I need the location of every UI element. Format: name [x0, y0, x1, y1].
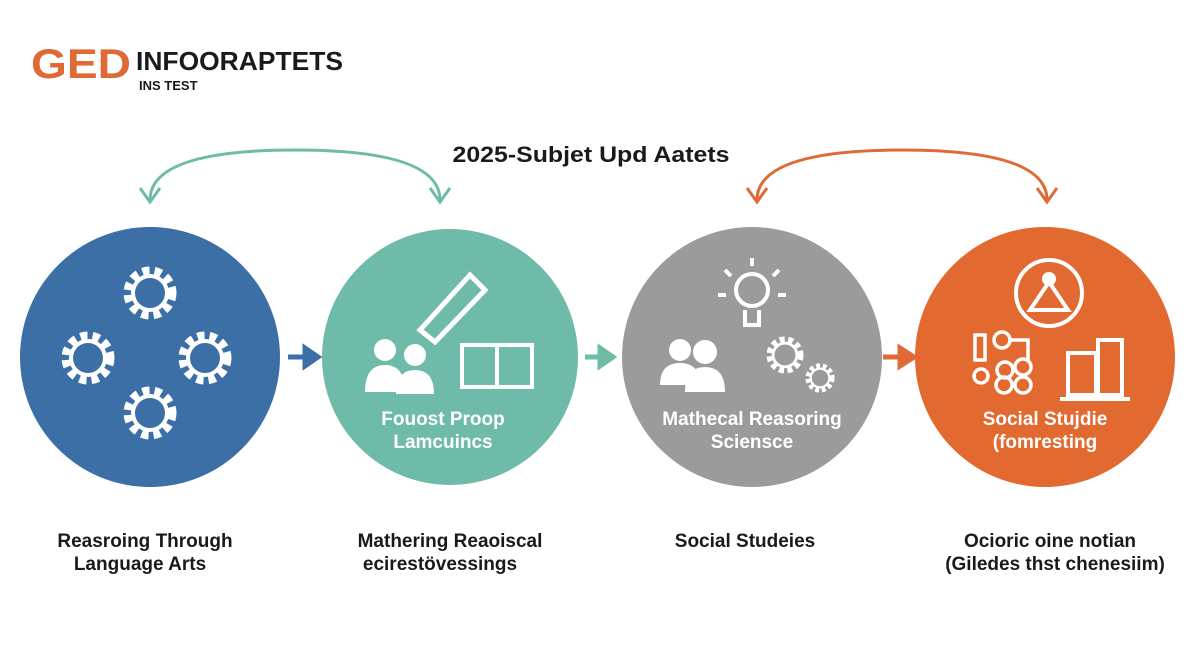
panel: circle 2	[322, 229, 578, 485]
arrow: teal arc	[140, 150, 450, 202]
icon: network & building	[974, 332, 1031, 393]
logo: GED	[31, 40, 131, 87]
panel: circle 3: Mathecal Reasoring	[662, 409, 842, 430]
panel: circle 2: Fouost Proop	[381, 409, 505, 430]
logo	[31, 40, 343, 93]
panel: circle 3: Sciensce	[711, 432, 793, 453]
label 2: ecirestövessings	[363, 554, 517, 575]
label 2: Mathering Reaoiscal	[358, 531, 542, 552]
icon: gears	[66, 271, 227, 435]
icon: pencil	[420, 275, 485, 342]
label 4: Ocioric oine notian	[964, 531, 1136, 552]
panel: circle 3	[622, 227, 882, 487]
panel: circle 4	[915, 227, 1175, 487]
logo: INS TEST	[139, 78, 198, 93]
panel: circle 1	[20, 227, 280, 487]
arrow: orange arc	[747, 150, 1057, 202]
icon: people & gears	[660, 339, 725, 392]
heading: 2025-Subjet Upd Aatets	[452, 142, 730, 167]
label 1: Reasroing Through	[57, 531, 233, 552]
label 1: Language Arts	[74, 554, 206, 575]
icon: triangle badge	[1016, 260, 1082, 326]
panel: circle 2: Lamcuincs	[393, 432, 493, 453]
label 4: (Giledes thst chenesiim)	[945, 554, 1165, 575]
panel: circle 4: Social Stujdie	[983, 409, 1107, 430]
arrow 3	[883, 348, 914, 366]
icon: lightbulb	[718, 258, 786, 325]
label 3: Social Studeies	[675, 531, 815, 552]
arrow 2	[585, 348, 613, 366]
logo: INFOORAPTETS	[136, 46, 343, 76]
panel: circle 4: (fomresting	[993, 432, 1097, 453]
arrow 1	[288, 348, 318, 366]
icon: people and book	[365, 339, 434, 394]
